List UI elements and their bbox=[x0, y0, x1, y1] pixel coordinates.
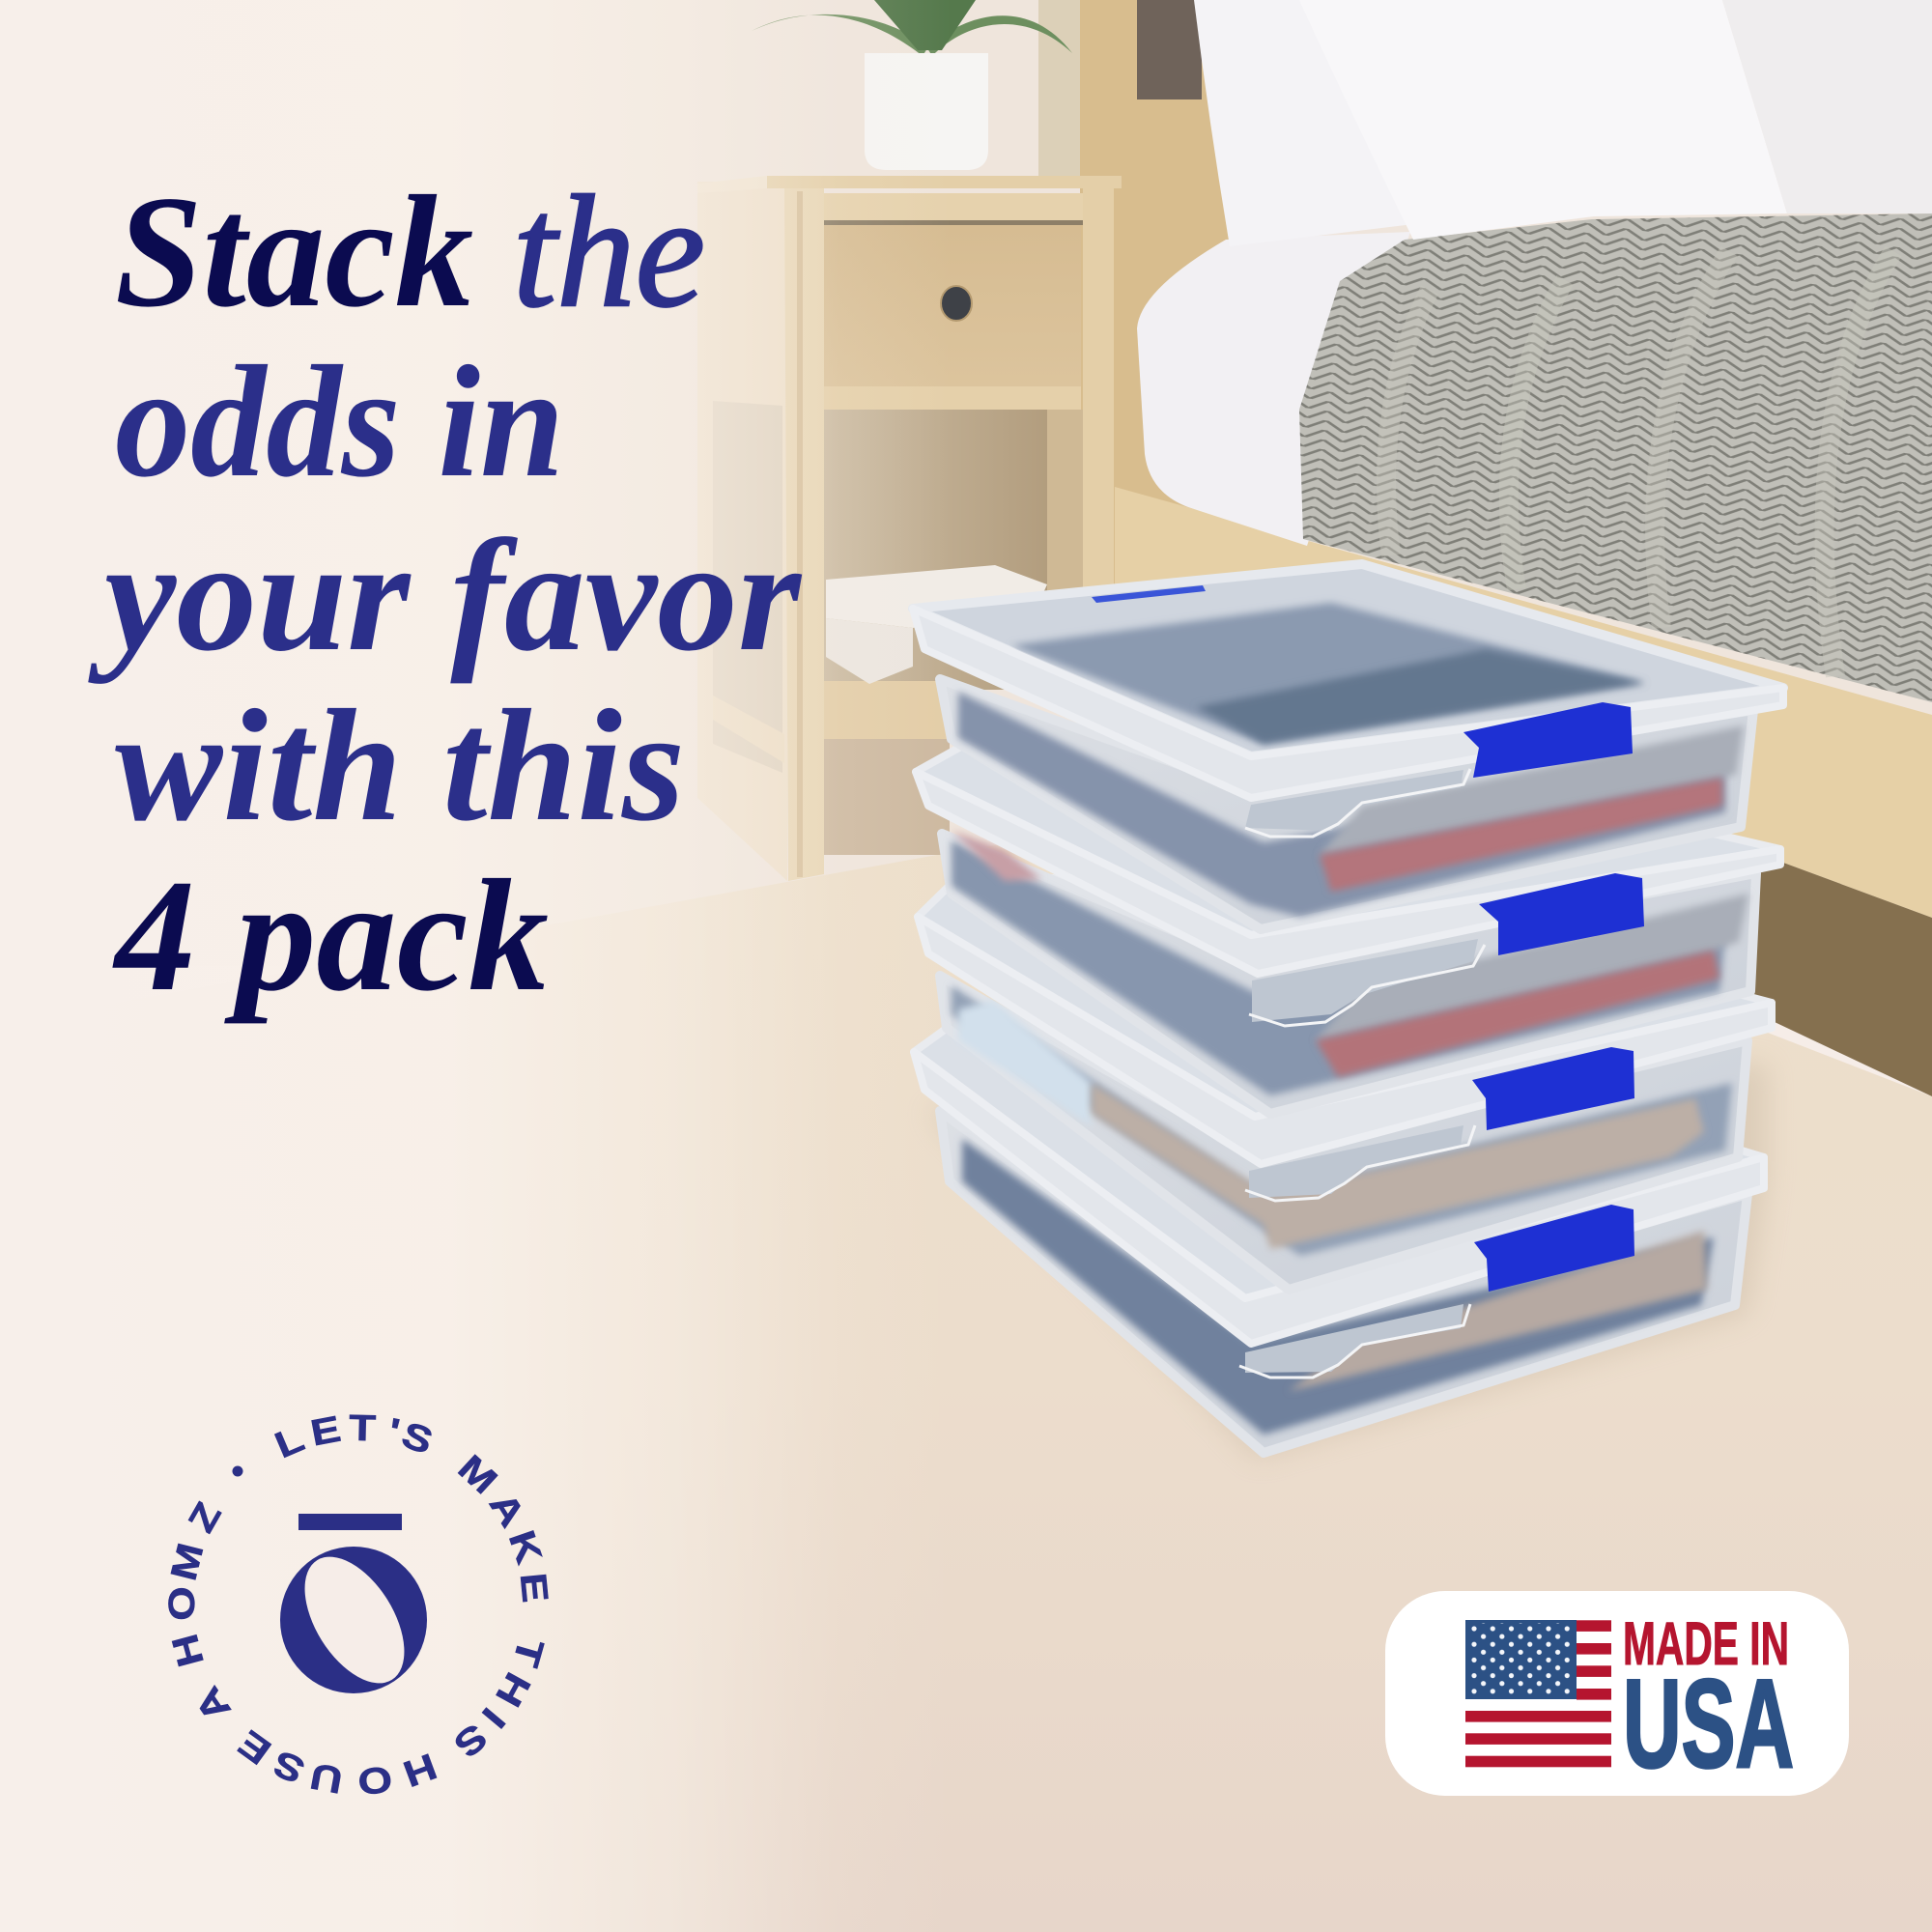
drawer rail bbox=[824, 386, 1081, 410]
headline line 3: your favor bbox=[88, 506, 802, 684]
bedding bbox=[1137, 0, 1932, 702]
USA text: USA bbox=[1623, 1653, 1794, 1794]
corner panel bbox=[1245, 770, 1463, 831]
wall trim bbox=[1038, 0, 1080, 176]
contents: beige cloth bbox=[1092, 1083, 1704, 1249]
headline line 5: 4 pack bbox=[112, 846, 549, 1024]
logo badge bbox=[161, 1406, 556, 1803]
headline line 4: with this bbox=[115, 676, 685, 854]
contents: beige cloth bbox=[1289, 1231, 1707, 1391]
vase bbox=[865, 53, 988, 170]
bed frame and headboard bbox=[1038, 0, 1932, 1096]
circular slogan: A bbox=[482, 1485, 533, 1534]
latch bbox=[1474, 1205, 1634, 1292]
contents: pink roll bbox=[1320, 778, 1722, 892]
circular slogan: O bbox=[356, 1758, 394, 1803]
plant bbox=[752, 0, 1072, 56]
circular slogan: L bbox=[269, 1417, 310, 1465]
storage box 1 (top) bbox=[913, 564, 1783, 929]
lid rim bbox=[916, 772, 1780, 974]
contents: dark folded clothes bbox=[962, 1139, 1714, 1435]
logo counter bbox=[284, 1540, 425, 1700]
stack shadow bbox=[927, 1063, 1768, 1459]
storage box 4 (bottom) bbox=[914, 1014, 1764, 1453]
contents: pink roll bbox=[1316, 951, 1719, 1077]
lid top bbox=[914, 1014, 1764, 1298]
made in USA badge bbox=[1385, 1591, 1849, 1796]
headline line 2: odds in bbox=[115, 332, 564, 510]
slogan dot bbox=[232, 1466, 243, 1476]
circular slogan: M bbox=[450, 1446, 505, 1502]
logo ring bbox=[280, 1547, 427, 1693]
handle edge bbox=[1239, 1304, 1470, 1378]
headboard post bbox=[1080, 0, 1235, 696]
lid rim bbox=[918, 917, 1772, 1164]
circular slogan: T bbox=[505, 1634, 552, 1671]
headline line 1: Stack the bbox=[115, 162, 705, 340]
circular slogan bbox=[161, 1406, 556, 1803]
circular slogan: A bbox=[186, 1680, 239, 1729]
far latch bbox=[1092, 585, 1206, 603]
contents: dark clothes bbox=[952, 985, 1732, 1256]
circular slogan: S bbox=[446, 1716, 496, 1766]
body bbox=[940, 679, 1753, 929]
contents: upper compartment bbox=[1320, 725, 1744, 855]
contents: dark clothes bbox=[952, 840, 1725, 1095]
patterned pillow bbox=[1722, 0, 1932, 213]
side panel bbox=[697, 182, 787, 881]
corner panel bbox=[1245, 1304, 1463, 1373]
circular slogan: H bbox=[398, 1746, 442, 1795]
circular slogan: E bbox=[307, 1407, 344, 1454]
throw fold bands bbox=[1386, 251, 1893, 676]
lower shelf bbox=[824, 681, 950, 739]
left fade overlay bbox=[0, 0, 1401, 1932]
corner panel bbox=[1252, 939, 1478, 1022]
latch bbox=[1479, 873, 1644, 955]
lid window: dark clothes bbox=[1196, 649, 1645, 744]
contents: upper compartment bbox=[1316, 894, 1748, 1040]
handle edge bbox=[1245, 769, 1470, 837]
lid top bbox=[916, 744, 1780, 935]
front right leg bbox=[1083, 188, 1114, 594]
drawer surround bbox=[824, 193, 1083, 225]
circular slogan: E bbox=[231, 1722, 278, 1773]
latch bbox=[1472, 1047, 1634, 1130]
circular slogan: H bbox=[163, 1630, 212, 1671]
tabletop bbox=[767, 176, 1122, 188]
books bbox=[826, 565, 1047, 684]
body bbox=[940, 1111, 1747, 1453]
circular slogan: U bbox=[307, 1755, 346, 1802]
storage box 2 bbox=[916, 744, 1780, 1114]
body bbox=[940, 976, 1747, 1290]
bed rail bbox=[1115, 487, 1932, 918]
pink cloth, far end bbox=[952, 831, 1041, 881]
latch bbox=[1463, 702, 1633, 778]
circular slogan: Z bbox=[180, 1495, 229, 1539]
background: carpet floor bbox=[0, 811, 1932, 1932]
lid top bbox=[918, 869, 1772, 1117]
grey herringbone throw bbox=[1299, 213, 1932, 702]
circular slogan: H bbox=[488, 1666, 539, 1714]
flag bbox=[1465, 1620, 1611, 1767]
lid window: blue-grey contents bbox=[1011, 603, 1645, 744]
circular slogan: T bbox=[349, 1406, 377, 1449]
lid rim bbox=[914, 1052, 1764, 1344]
storage box 3 bbox=[918, 869, 1772, 1290]
rear post bbox=[1047, 410, 1084, 603]
body bbox=[942, 834, 1756, 1114]
open shelf bbox=[824, 410, 1047, 690]
lid top bbox=[913, 564, 1783, 756]
circular slogan: I bbox=[474, 1700, 514, 1736]
lid rim bbox=[913, 609, 1783, 798]
circular slogan: K bbox=[501, 1525, 551, 1569]
nightstand bbox=[697, 0, 1122, 881]
drawer knob bbox=[941, 286, 972, 321]
background: bedroom wall bbox=[0, 0, 1932, 966]
contents: light blue cloth bbox=[958, 1000, 1092, 1126]
drawer bbox=[824, 225, 1081, 386]
handle edge bbox=[1249, 945, 1485, 1026]
made in text: MADE IN bbox=[1623, 1610, 1789, 1678]
handle edge bbox=[1245, 1125, 1475, 1201]
corner panel bbox=[1249, 1125, 1463, 1198]
headline bbox=[88, 162, 802, 1024]
circular slogan: ' bbox=[384, 1410, 403, 1453]
front pillow bbox=[1299, 0, 1787, 240]
contents: dark clothes bbox=[958, 692, 1725, 917]
circular slogan: S bbox=[397, 1413, 439, 1463]
circular slogan: O bbox=[161, 1586, 202, 1621]
circular slogan: S bbox=[267, 1743, 310, 1792]
logo bar bbox=[298, 1514, 402, 1530]
circular slogan: M bbox=[162, 1539, 212, 1584]
under-bed shadow bbox=[1729, 850, 1932, 1096]
fitted sheet bbox=[1137, 232, 1410, 546]
circular slogan: E bbox=[513, 1571, 556, 1605]
headboard dark panel bbox=[1137, 0, 1202, 99]
badge panel bbox=[1385, 1591, 1849, 1796]
rear pillow bbox=[1194, 0, 1430, 246]
front left leg bbox=[784, 188, 824, 881]
